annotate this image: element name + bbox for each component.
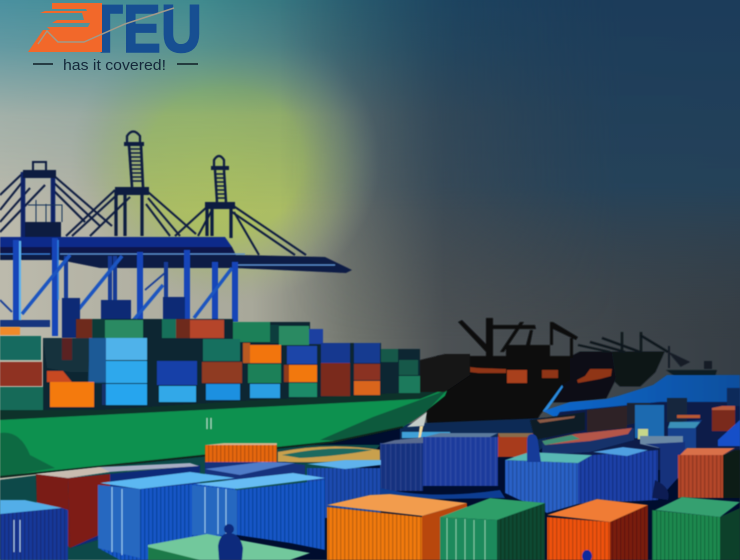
foreground right containers <box>327 494 740 560</box>
midground blue containers and figures <box>380 433 740 513</box>
blue container one <box>98 472 235 560</box>
red-orange container <box>547 499 648 560</box>
blue container two <box>192 473 325 550</box>
orange back container <box>205 443 277 468</box>
distant dark ships <box>423 318 717 424</box>
logo tagline: has it covered! <box>63 58 166 74</box>
left container stack <box>0 336 94 410</box>
center bright blue container <box>505 434 592 513</box>
crane cable stays <box>0 172 306 255</box>
crane deck beams and boom <box>0 237 352 273</box>
second ship <box>545 345 616 402</box>
middle container stacks <box>157 339 380 402</box>
navy container group <box>380 433 533 500</box>
light blue stack <box>89 338 147 405</box>
tagline dashes <box>33 63 198 65</box>
harbour water <box>0 375 740 560</box>
crane legs <box>0 238 235 336</box>
blue back middle container <box>205 462 305 480</box>
red long container <box>36 463 200 548</box>
main ship cargo stripe <box>452 365 558 383</box>
third ship <box>590 332 668 386</box>
worker head <box>582 550 592 560</box>
navy side container right <box>578 436 685 504</box>
blue back right container <box>307 460 381 518</box>
large orange container <box>327 494 467 560</box>
standing worker <box>218 524 243 560</box>
far ship <box>666 346 717 380</box>
logo <box>28 0 202 74</box>
green container ship <box>0 319 470 477</box>
crane tower one <box>23 162 62 240</box>
second ship cargo stripe <box>577 369 612 383</box>
blue left container <box>0 500 68 560</box>
main dark ship <box>423 318 578 424</box>
foreground left containers <box>0 443 381 560</box>
deck railing <box>0 391 440 420</box>
ship hull <box>0 390 447 477</box>
top row containers <box>0 319 420 393</box>
right green container <box>652 497 740 560</box>
crane tower two <box>115 132 149 236</box>
ship bow highlight <box>543 385 563 412</box>
logo orange speed stripes <box>28 3 102 52</box>
quayside containers in the distance <box>530 388 740 470</box>
crane tower three <box>205 156 235 238</box>
crane base machinery <box>0 297 185 338</box>
dark back stack <box>43 319 420 417</box>
red container right <box>678 448 740 498</box>
gantry cranes <box>0 132 352 338</box>
green door container <box>440 498 545 560</box>
mint green container <box>148 534 310 560</box>
logo swoosh <box>38 8 174 44</box>
